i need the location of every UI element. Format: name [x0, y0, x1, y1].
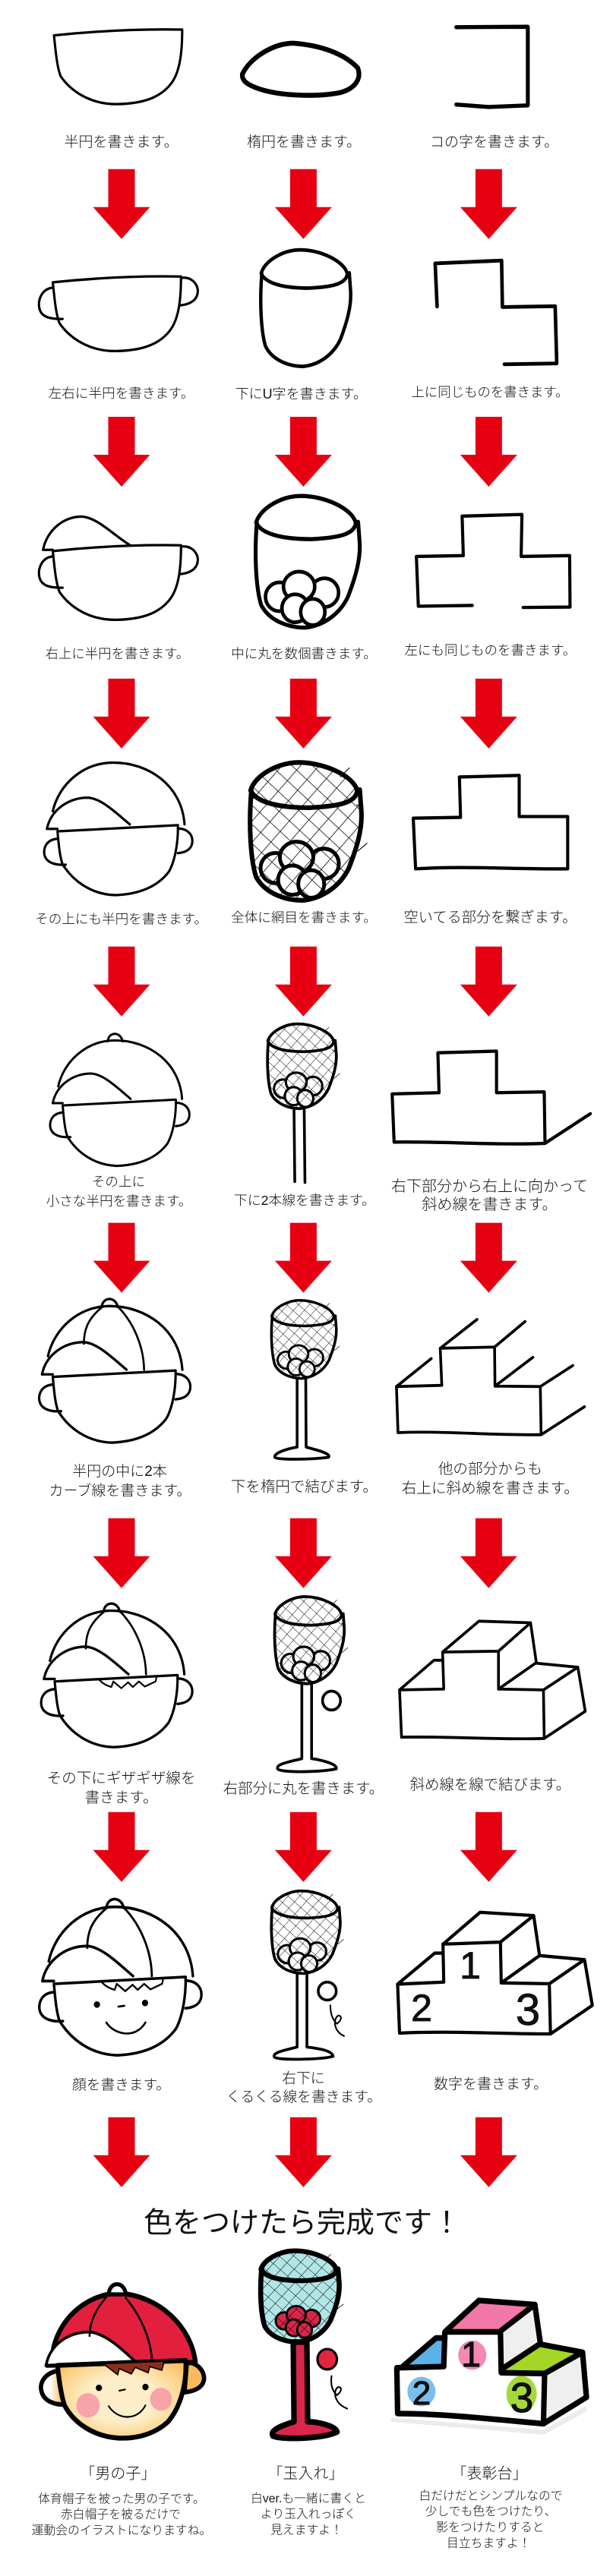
arrow 6 col 2 — [275, 1518, 332, 1588]
arrow 4 col 2 — [275, 947, 332, 1017]
arrow 1 col 1 — [93, 169, 150, 239]
caption: 左右に半円: 左右に半円を書きます。 — [49, 386, 194, 401]
description: 玉入れ: 白ver.も一緒に書くと — [251, 2492, 366, 2505]
final illustration: tama-ire goblet — [261, 2251, 347, 2439]
caption: 右下にくるくる線: くるくる線を書きます。 — [226, 2089, 381, 2105]
arrow 1 col 3 — [460, 169, 517, 239]
arrow 6 col 1 — [93, 1518, 150, 1588]
final podium numbers — [412, 2335, 533, 2421]
caption: その上に小さな半円: その上に — [92, 1174, 145, 1189]
caption: 上に同じもの: 上に同じものを書きます。 — [412, 385, 568, 400]
step 5 col 2: cup with two stem lines — [267, 1024, 340, 1182]
arrow 8 col 2 — [275, 2117, 332, 2187]
description: 玉入れ: より玉入れっぽく — [261, 2507, 356, 2521]
caption: 下に2本線: 下に2本線を書きます。 — [234, 1193, 375, 1208]
step 2 col 3: stepped line — [435, 260, 557, 364]
arrow 2 col 3 — [460, 417, 517, 487]
step 8 col 3: podium with numbers: 2 — [411, 1987, 432, 2029]
description: 表彰台: 影をつけたりすると — [436, 2521, 544, 2534]
description: 表彰台: 少しでも色をつけたり、 — [425, 2505, 556, 2518]
arrow 5 col 2 — [275, 1223, 332, 1293]
step 7 col 1: cap with zigzag bangs — [41, 1603, 192, 1747]
arrow 7 col 3 — [460, 1812, 517, 1882]
step 5 col 3: T shape with diagonal — [392, 1052, 590, 1144]
caption: 半円の中に2本: カーブ線を書きます。 — [49, 1482, 191, 1499]
step 4 col 2: netted cup — [250, 762, 367, 900]
description: 男の子: 体育帽子を被った男の子です。 — [38, 2492, 205, 2505]
step 8 col 2: goblet with squiggle — [271, 1891, 344, 2059]
step 6 col 1: cap with seams — [39, 1299, 191, 1442]
caption: 右部分に丸: 右部分に丸を書きます。 — [223, 1780, 384, 1797]
arrow 1 col 2 — [275, 169, 332, 239]
arrow 6 col 3 — [460, 1518, 517, 1588]
caption: 数字を書きます: 数字を書きます。 — [434, 2076, 548, 2092]
caption: 右下部分から: 斜め線を書きます。 — [422, 1196, 558, 1213]
title: 表彰台: 「表彰台」 — [451, 2464, 527, 2483]
step 6 col 3: podium with diagonals — [397, 1320, 584, 1435]
description: 男の子: 運動会のイラストになりますね。 — [32, 2524, 211, 2537]
step 1 col 3: U-turned square bracket — [457, 27, 528, 107]
final illustration: colored podium — [391, 2300, 586, 2435]
arrow 2 col 1 — [93, 417, 150, 487]
description: 男の子: 赤白帽子を被るだけで — [61, 2508, 181, 2521]
caption: 空いてる部分: 空いてる部分を繋ぎます。 — [404, 910, 577, 926]
caption: その上に小さな半円: 小さな半円を書きます。 — [46, 1193, 191, 1209]
title: 男の子: 「男の子」 — [80, 2464, 156, 2483]
caption: その上にも半円: その上にも半円を書きます。 — [35, 912, 207, 927]
step 8 col 3: podium with numbers: 1 — [460, 1944, 481, 1987]
final podium numbers: 1 — [461, 2335, 481, 2374]
step 3 col 3: T-shaped outline with gap — [416, 515, 570, 607]
final podium numbers: 2 — [412, 2375, 431, 2412]
step 8 col 3: podium with numbers: 3 — [516, 1985, 540, 2035]
step 5 col 1: head with knob — [50, 1034, 189, 1166]
step 1 col 2: ellipse — [242, 43, 359, 96]
caption: 下を楕円で: 下を楕円で結びます。 — [231, 1478, 378, 1495]
step 3 col 2: cup with balls — [256, 496, 360, 628]
step 2 col 2: cup rim and body — [261, 250, 351, 367]
caption: その下にギザギザ線: その下にギザギザ線を — [47, 1770, 196, 1787]
title: 玉入れ: 「玉入れ」 — [267, 2464, 343, 2483]
caption: 中に丸: 中に丸を数個書きます。 — [231, 646, 377, 661]
arrow 7 col 1 — [93, 1812, 150, 1882]
caption: 顔を書きます: 顔を書きます。 — [72, 2076, 170, 2092]
heading: colouring finish: 色をつけたら完成です！ — [144, 2208, 461, 2240]
caption: 楕円: 楕円を書きます。 — [247, 134, 361, 150]
step 2 col 1: bowl with side handles — [39, 276, 197, 351]
caption: 全体に網目: 全体に網目を書きます。 — [231, 910, 377, 925]
arrow 5 col 3 — [460, 1223, 517, 1293]
step 8 col 3: podium with numbers — [397, 1912, 592, 2035]
step 7 col 2: goblet with ball — [274, 1597, 348, 1772]
caption: 半円の中に2本: 半円の中に2本 — [72, 1463, 167, 1480]
final podium numbers: 3 — [510, 2374, 533, 2421]
arrow 5 col 1 — [93, 1223, 150, 1293]
description: 表彰台: 白だけだとシンプルなので — [419, 2489, 563, 2503]
arrow 8 col 3 — [460, 2117, 517, 2187]
caption: 他の部分からも: 右上に斜め線を書きます。 — [402, 1480, 579, 1497]
arrow 2 col 2 — [275, 417, 332, 487]
caption: 左にも同じもの: 左にも同じものを書きます。 — [405, 643, 576, 658]
caption: 他の部分からも: 他の部分からも — [438, 1461, 542, 1477]
step 6 col 2: goblet with base — [271, 1301, 340, 1459]
caption: 右上に半円: 右上に半円を書きます。 — [46, 646, 189, 661]
arrow 4 col 3 — [460, 947, 517, 1017]
caption: 右下部分から: 右下部分から右上に向かって — [391, 1178, 588, 1195]
arrow 3 col 2 — [275, 679, 332, 749]
step 1 col 1: half circle — [54, 30, 182, 104]
caption: 半円: 半円を書きます。 — [65, 134, 179, 150]
caption: 右下にくるくる線: 右下に — [282, 2070, 325, 2086]
description: 表彰台: 目立ちますよ！ — [447, 2537, 531, 2550]
description: 玉入れ: 見えますよ！ — [270, 2524, 343, 2537]
arrow 4 col 1 — [93, 947, 150, 1017]
arrow 3 col 1 — [93, 679, 150, 749]
step 4 col 1: head with dome — [44, 762, 192, 895]
arrow 8 col 1 — [93, 2117, 150, 2187]
arrow 7 col 2 — [275, 1812, 332, 1882]
final illustration: boy in red cap — [41, 2284, 204, 2438]
step 7 col 3: connected podium — [400, 1621, 586, 1739]
step 4 col 3: closed T shape — [413, 775, 567, 869]
arrow 3 col 3 — [460, 679, 517, 749]
caption: 斜め線を線で: 斜め線を線で結びます。 — [410, 1777, 570, 1793]
step 8 col 1: boy's face — [39, 1899, 201, 2055]
step 3 col 1: bowl with brim — [39, 516, 197, 620]
caption: コの字: コの字を書きます。 — [430, 134, 558, 150]
caption: その下にギザギザ線: 書きます。 — [85, 1789, 158, 1806]
caption: 下にU字: 下にU字を書きます。 — [235, 386, 367, 402]
